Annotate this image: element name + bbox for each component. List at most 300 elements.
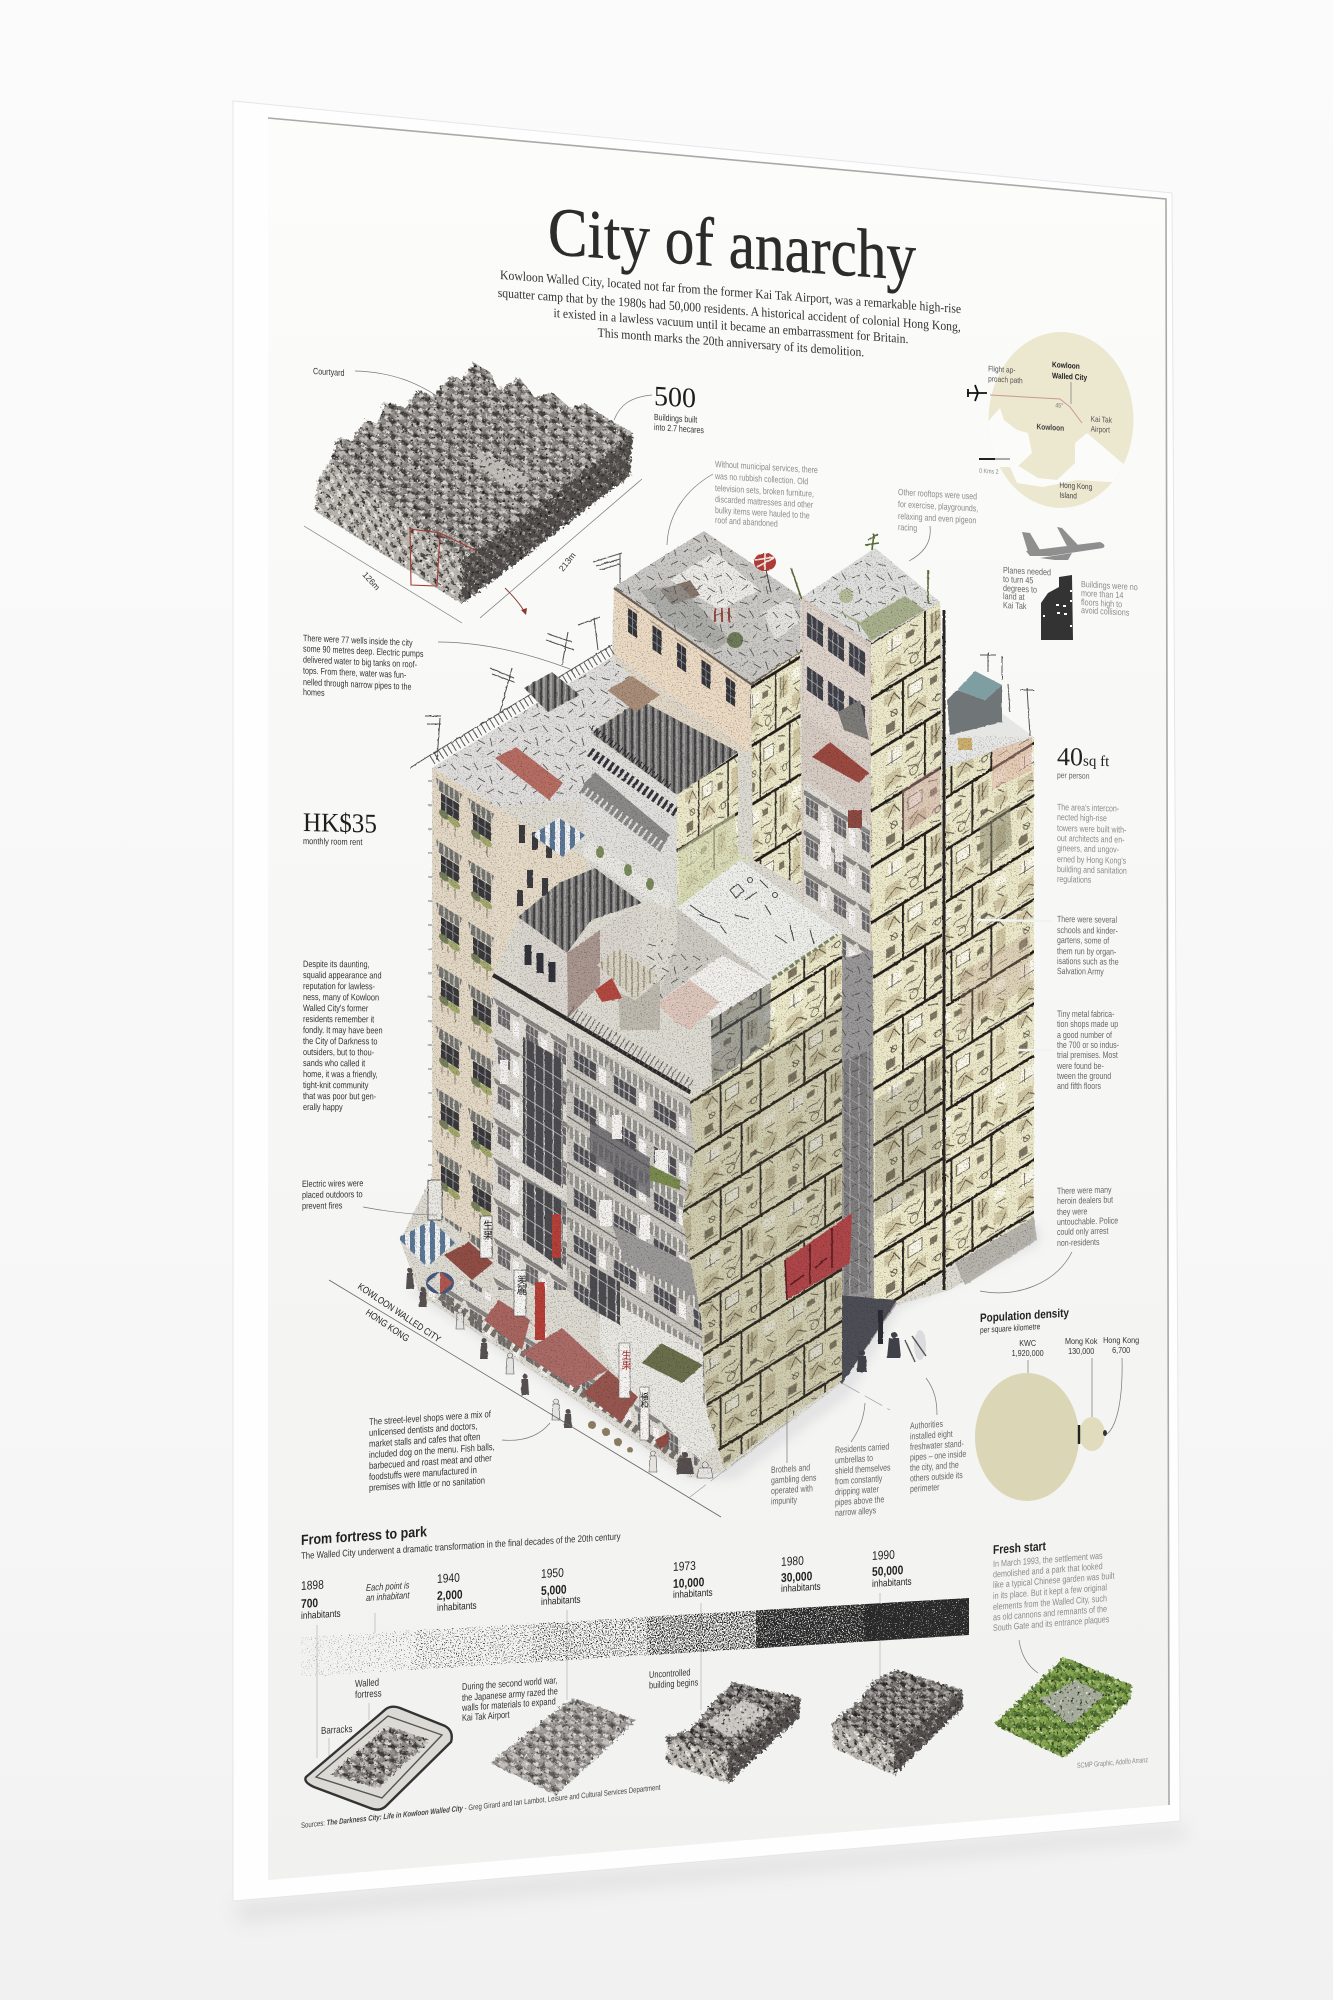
note: schools: gartens, some of bbox=[1057, 935, 1110, 946]
tower C tinted rooms bbox=[960, 738, 1032, 1030]
note: standpipes: pipes – one inside bbox=[910, 1449, 967, 1463]
note: heroin: There were many bbox=[1057, 1185, 1112, 1196]
house windows bbox=[528, 945, 552, 982]
note: heroin: non-residents bbox=[1057, 1237, 1099, 1248]
timeline 1990: 1990 bbox=[872, 1549, 895, 1563]
laundry bbox=[500, 1060, 668, 1239]
legend: each point: Each point is bbox=[366, 1579, 410, 1593]
shop signs bbox=[428, 1180, 649, 1440]
timeline 1980: 30,000 bbox=[781, 1570, 812, 1585]
note: fresh start: like a typical Chinese garden was built bbox=[993, 1571, 1115, 1590]
note: heroin: they were bbox=[1057, 1206, 1088, 1217]
deck dark room bbox=[711, 982, 771, 1085]
note: standpipes: perimeter bbox=[910, 1482, 940, 1494]
stat: 500 buildings: Buildings built bbox=[654, 412, 698, 425]
timeline 1898: inhabitants bbox=[301, 1608, 341, 1621]
note: wells: tops. From there, water was fun- bbox=[303, 666, 406, 680]
map labels: Kai Tak bbox=[1091, 414, 1112, 425]
deck striped awning bbox=[578, 772, 670, 852]
attic shed bbox=[607, 676, 660, 712]
market umbrella bbox=[426, 1272, 454, 1294]
map labels: Island bbox=[1059, 490, 1077, 501]
deck dark railing bbox=[590, 752, 676, 812]
note: wells: some 90 metres deep. Electric pumps bbox=[303, 644, 423, 659]
shack wall bbox=[618, 980, 660, 1030]
stat: floor space: per person bbox=[1057, 770, 1089, 781]
house below lower roof bbox=[518, 905, 642, 1018]
red room bbox=[785, 1213, 852, 1300]
tower C ground clutter bbox=[955, 1217, 1037, 1285]
lower terrace bbox=[657, 955, 771, 1020]
side wall scribble bbox=[640, 930, 771, 1020]
dimension lines bbox=[304, 479, 642, 623]
note: planes: to turn 45 bbox=[1003, 574, 1034, 586]
tower A wall below windows bbox=[612, 657, 751, 752]
middle left facade bbox=[493, 985, 567, 1290]
timeline 1940: 2,000 bbox=[437, 1589, 463, 1603]
shop signs: 福和 bbox=[640, 1392, 649, 1409]
thumbnail: fortress 1898 bbox=[305, 1707, 452, 1810]
red canopy 3 bbox=[583, 1370, 638, 1422]
thumbnail: 1973 bbox=[665, 1682, 800, 1783]
note: heroin: heroin dealers but bbox=[1057, 1195, 1114, 1206]
label: barracks: Barracks bbox=[321, 1723, 353, 1736]
scale bar bbox=[979, 458, 995, 460]
chart labels: KWC bbox=[1019, 1338, 1036, 1348]
main roof deck bbox=[432, 657, 642, 806]
note: towers: towers were built with- bbox=[1057, 823, 1127, 835]
tower B laundry balconies bbox=[820, 810, 862, 865]
chart leaders bbox=[1028, 1358, 1122, 1434]
stat: room rent: HK$35 bbox=[303, 807, 377, 839]
label: walled fortress: fortress bbox=[355, 1687, 382, 1700]
room courtyard lower bbox=[678, 812, 738, 905]
block left side bbox=[315, 462, 462, 604]
note: street shops: foodstuffs were manufactured in bbox=[369, 1464, 477, 1482]
timeline 1950: inhabitants bbox=[541, 1594, 581, 1607]
dimension 213m: 213m bbox=[557, 550, 578, 573]
tower B red awning bbox=[812, 742, 869, 783]
green window planter bbox=[650, 1165, 680, 1190]
chart labels: 1,920,000 bbox=[1012, 1348, 1044, 1358]
blue stripe market awning bbox=[398, 1220, 455, 1267]
frame shadow bbox=[233, 1824, 1190, 1922]
note: fresh start: as old cannons and remnants of the bbox=[993, 1604, 1107, 1623]
Hong Kong bubble bbox=[1103, 1430, 1107, 1436]
note: rubbish: Without municipal services, there bbox=[715, 459, 818, 475]
leader: electric wires bbox=[363, 1207, 437, 1215]
small windows bbox=[520, 825, 549, 906]
note: brothels: gambling dens bbox=[771, 1473, 816, 1486]
note: second world war: Kai Tak Airport bbox=[462, 1709, 510, 1723]
umbrella bbox=[754, 553, 776, 592]
note: rooftops: Other rooftops were used bbox=[898, 487, 977, 502]
note: height limit: Buildings were no bbox=[1081, 579, 1138, 592]
poster paper bbox=[268, 118, 1169, 1880]
main cutaway building bbox=[398, 531, 1040, 1480]
note: fresh start: in its place. But it kept a few original bbox=[993, 1582, 1107, 1601]
leader: street shops bbox=[502, 1423, 550, 1440]
base silhouette bbox=[400, 531, 1034, 1478]
map labels: Kowloon bbox=[1036, 422, 1065, 433]
note: umbrellas: pipes above the bbox=[835, 1494, 885, 1508]
note: street shops: market stalls and cafes that often bbox=[369, 1431, 481, 1449]
leader: 500 bbox=[614, 395, 652, 420]
note: street shops: premises with little or no sanitation bbox=[369, 1475, 485, 1493]
label: Kowloon Walled City: KOWLOON WALLED CITY bbox=[356, 1281, 443, 1345]
block right side bbox=[462, 433, 633, 604]
timeline 1973: 1973 bbox=[673, 1560, 696, 1574]
note: despite: reputation for lawless- bbox=[303, 980, 375, 992]
tower B cut rooms bbox=[871, 602, 944, 1318]
upper deck facade bbox=[581, 733, 677, 903]
map labels: Walled City bbox=[1052, 371, 1088, 383]
note: despite: ness, many of Kowloon bbox=[303, 991, 379, 1003]
shop signs: 美麗 bbox=[514, 1274, 526, 1296]
chart labels: 6,700 bbox=[1112, 1345, 1131, 1355]
map land disc bbox=[988, 332, 1134, 508]
note: despite: residents remember it bbox=[303, 1013, 375, 1025]
note: rubbish: was no rubbish collection. Old bbox=[714, 471, 808, 487]
border line right bbox=[690, 1383, 890, 1497]
map labels: 45° bbox=[1055, 403, 1064, 410]
leader: brothels bbox=[786, 1387, 788, 1463]
shop signs: 生果 bbox=[480, 1219, 492, 1241]
tower A roof bbox=[614, 531, 800, 683]
legend: each point: an inhabitant bbox=[366, 1589, 410, 1603]
sources: Sources: The Darkness City: Life in Kowloon Walled City - Greg Girard and Ian Lambot, Leisure and Cultural Services Department bbox=[301, 1784, 661, 1830]
courtyard room bbox=[677, 853, 752, 908]
front dense facade bbox=[567, 1033, 707, 1413]
tower B windows band bbox=[804, 602, 870, 760]
note: fresh start: elements from the Walled City, such bbox=[993, 1593, 1107, 1612]
note: electric wires: Electric wires were bbox=[302, 1177, 364, 1189]
leader: courtyard bbox=[355, 371, 437, 396]
chart labels: 130,000 bbox=[1068, 1346, 1095, 1356]
red market awning left bbox=[444, 1242, 493, 1280]
thumbnail: 1940s bbox=[490, 1698, 636, 1795]
note: schools: schools and kinder- bbox=[1057, 925, 1118, 936]
tower A facade bbox=[614, 590, 751, 752]
block top surface bbox=[330, 363, 633, 560]
stairwell scribble bbox=[838, 950, 874, 1300]
deck plant balcony bbox=[582, 840, 672, 910]
frame inner edge bbox=[268, 118, 1169, 1805]
note: despite: sands who called it bbox=[303, 1057, 366, 1069]
chart labels: Hong Kong bbox=[1103, 1335, 1139, 1345]
tower A antenna bbox=[593, 553, 622, 583]
note: rubbish: discarded mattresses and other bbox=[715, 494, 813, 510]
note: schools: There were several bbox=[1057, 914, 1117, 925]
timeline 1898: 700 bbox=[301, 1597, 318, 1611]
grate windows column bbox=[523, 1037, 563, 1188]
stat: 500 buildings: 500 bbox=[654, 381, 696, 415]
lower block shading bbox=[682, 1000, 842, 1467]
aerial city block illustration bbox=[304, 363, 642, 623]
note: despite: tight-knit community bbox=[303, 1079, 369, 1091]
bubble contact bbox=[1078, 1425, 1080, 1444]
tower C roof bbox=[944, 712, 1034, 767]
small red canopy bbox=[655, 1432, 669, 1450]
pipe between towers bbox=[942, 610, 946, 1290]
pale lower facade bbox=[600, 1295, 720, 1470]
detail cutout outline bbox=[410, 529, 477, 586]
window block bbox=[590, 1265, 620, 1325]
note: planes: Planes needed bbox=[1003, 565, 1051, 578]
note: metal shops: a good number of bbox=[1057, 1030, 1113, 1040]
note: uncontrolled building: building begins bbox=[649, 1676, 698, 1691]
cut rooms mid block bbox=[677, 753, 738, 897]
note: fresh start: demolished and a park that looked bbox=[993, 1561, 1103, 1580]
tower B facade bbox=[802, 597, 871, 1050]
leader: schools bbox=[977, 920, 1052, 921]
icon: grey plane bbox=[1022, 527, 1104, 560]
intro paragraph: This month marks the 20th anniversary of its demolition. bbox=[598, 325, 864, 360]
note: standpipes: the city, and the bbox=[910, 1460, 959, 1473]
timeline 1950: 1950 bbox=[541, 1567, 564, 1581]
note: street shops: unlicensed dentists and doctors, bbox=[369, 1420, 477, 1438]
stairwell ladder bbox=[844, 1050, 870, 1296]
dots 1973 bbox=[647, 1610, 756, 1655]
leader: rooftops bbox=[909, 526, 930, 561]
timeline 1940: 1940 bbox=[437, 1572, 460, 1586]
note: rooftops: relaxing and even pigeon bbox=[898, 511, 976, 526]
courtyard opening bbox=[471, 451, 532, 488]
dots 1940 bbox=[415, 1624, 533, 1670]
note: rooftops: racing bbox=[898, 522, 917, 533]
railing balcony bbox=[570, 1012, 690, 1086]
timeline 1950: 5,000 bbox=[541, 1584, 567, 1598]
upper-middle beige facade bbox=[495, 806, 587, 970]
note: towers: out architects and en- bbox=[1057, 833, 1125, 845]
heading: fresh start: Fresh start bbox=[993, 1540, 1046, 1557]
wires left of facade bbox=[428, 780, 432, 1180]
timeline 1990: 50,000 bbox=[872, 1564, 903, 1579]
map labels: proach path bbox=[988, 374, 1023, 386]
leader: wells bbox=[438, 642, 570, 669]
roof railing bbox=[432, 650, 612, 760]
alley pedestrians and standpipe bbox=[857, 1310, 926, 1372]
note: wells: delivered water to big tanks on roof- bbox=[303, 655, 417, 670]
dimension 126m: 126m bbox=[361, 570, 382, 592]
note: umbrellas: umbrellas to bbox=[835, 1453, 873, 1466]
map labels: Kowloon bbox=[1052, 360, 1080, 371]
note: wells: nelled through narrow pipes to the bbox=[303, 677, 412, 692]
thumbnail: park bbox=[995, 1657, 1132, 1758]
red canopy 1 bbox=[484, 1300, 530, 1350]
arrow to Walled City bbox=[1070, 382, 1072, 404]
tower B rooftop garden bbox=[791, 534, 928, 641]
red room detail bbox=[785, 1228, 832, 1300]
note: uncontrolled building: Uncontrolled bbox=[649, 1666, 691, 1680]
small red awning bbox=[595, 978, 622, 1002]
subheading: The Walled City underwent a dramatic transformation in the final decades of the 20th century bbox=[301, 1531, 621, 1561]
tin shack bbox=[597, 948, 657, 1000]
dots 1898 bbox=[301, 1630, 415, 1677]
note: heroin: untouchable. Police bbox=[1057, 1216, 1119, 1227]
note: fresh start: In March 1993, the settlement was bbox=[993, 1551, 1103, 1569]
map water bbox=[985, 408, 1127, 487]
dark alley bbox=[838, 1295, 897, 1384]
red canopy 2 bbox=[522, 1328, 608, 1388]
note: heroin: could only arrest bbox=[1057, 1226, 1109, 1237]
tower A roof scribble bbox=[614, 531, 800, 683]
note: standpipes: freshwater stand- bbox=[910, 1439, 964, 1452]
ground wash bbox=[405, 1225, 1040, 1480]
note: metal shops: and fifth floors bbox=[1057, 1081, 1101, 1091]
tower B tinted rooms bbox=[875, 765, 940, 1220]
note: planes: Kai Tak bbox=[1003, 600, 1027, 611]
note: rubbish: bulky items were hauled to the bbox=[715, 505, 810, 521]
label: Hong Kong: HONG KONG bbox=[364, 1307, 412, 1344]
tower A ledge bbox=[614, 588, 802, 684]
timeline 1980: inhabitants bbox=[781, 1581, 821, 1594]
note: standpipes: Authorities bbox=[910, 1419, 943, 1431]
terrace figures bbox=[690, 878, 814, 944]
grey corrugated roof lower bbox=[518, 868, 642, 953]
note: street shops: The street-level shops were a mix of bbox=[369, 1408, 491, 1427]
pale shopfront strip bbox=[420, 1280, 700, 1478]
deck dark room shade bbox=[711, 982, 771, 1085]
note: wells: homes bbox=[303, 687, 325, 698]
note: wells: There were 77 wells inside the city bbox=[303, 633, 413, 648]
pink deck section bbox=[657, 980, 720, 1030]
map labels: Airport bbox=[1091, 424, 1110, 435]
note: despite: home, it was a friendly, bbox=[303, 1068, 378, 1080]
note: metal shops: tion shops made up bbox=[1057, 1019, 1119, 1029]
note: brothels: impunity bbox=[771, 1495, 798, 1507]
chart labels: Mong Kok bbox=[1065, 1336, 1097, 1346]
leader: fresh start bbox=[1019, 1640, 1038, 1673]
grey corrugated roof upper bbox=[591, 700, 738, 795]
roof striped shed bbox=[524, 672, 580, 712]
note: second world war: During the second world war, bbox=[462, 1674, 557, 1692]
note: metal shops: Tiny metal fabrica- bbox=[1057, 1009, 1115, 1019]
note: rubbish: roof and abandoned bbox=[715, 515, 778, 529]
note: metal shops: trial premises. Most bbox=[1057, 1050, 1118, 1060]
street goods bbox=[588, 1421, 633, 1453]
stat: 500 buildings bbox=[654, 381, 704, 435]
heading: from fortress to park: From fortress to park bbox=[301, 1523, 427, 1548]
note: despite: Walled City's former bbox=[303, 1002, 369, 1014]
note: height limit: more than 14 bbox=[1081, 588, 1124, 601]
note: metal shops: were found be- bbox=[1056, 1061, 1104, 1071]
note: metal shops: the 700 or so indus- bbox=[1057, 1040, 1119, 1050]
roof red awning bbox=[495, 747, 563, 800]
locator map bbox=[967, 332, 1134, 508]
tower A cut rooms bbox=[751, 652, 802, 887]
note: standpipes: others outside its bbox=[910, 1470, 963, 1484]
stat: floor space: 40sq ft bbox=[1057, 742, 1110, 772]
note: brothels: Brothels and bbox=[771, 1463, 811, 1475]
note: umbrellas: narrow alleys bbox=[835, 1505, 876, 1518]
left facade columns bbox=[433, 768, 495, 1260]
note: umbrellas: Residents carried bbox=[835, 1442, 890, 1455]
pale ledge roofline bbox=[493, 975, 690, 1092]
upper roof railing bbox=[592, 728, 672, 788]
note: despite: Despite its daunting, bbox=[303, 958, 370, 970]
note: second world war: walls for materials to expand bbox=[461, 1695, 556, 1713]
leader: heroin bbox=[980, 1252, 1072, 1293]
note: umbrellas: from constantly bbox=[835, 1473, 883, 1487]
tower C cut rooms bbox=[946, 737, 1034, 1270]
front dark grates bbox=[590, 1120, 650, 1198]
note: despite: outsiders, but to thou- bbox=[303, 1046, 374, 1058]
blue striped awning bbox=[532, 818, 585, 857]
lower grates bbox=[523, 1180, 563, 1270]
chart heading: Population density bbox=[980, 1307, 1070, 1325]
terrace planters bbox=[773, 936, 838, 980]
timeline 1940: inhabitants bbox=[437, 1600, 477, 1613]
deck awning ribs bbox=[580, 788, 664, 848]
note: metal shops: tween the ground bbox=[1057, 1071, 1111, 1081]
house stained wall bbox=[567, 930, 600, 1018]
leader: umbrellas bbox=[851, 1403, 865, 1442]
leader: standpipes bbox=[926, 1378, 937, 1415]
note: fresh start: South Gate and its entrance plaques bbox=[993, 1614, 1109, 1633]
note: towers: nected high-rise bbox=[1057, 812, 1107, 824]
note: rubbish: television sets, broken furniture, bbox=[715, 483, 814, 499]
leader: rubbish bbox=[667, 474, 713, 545]
note: despite: erally happy bbox=[303, 1101, 343, 1112]
map labels: Flight ap- bbox=[988, 364, 1016, 375]
note: standpipes: installed eight bbox=[910, 1429, 953, 1442]
note: despite: squalid appearance and bbox=[303, 969, 382, 981]
timeline 1973: 10,000 bbox=[673, 1576, 704, 1591]
note: schools: Salvation Army bbox=[1057, 966, 1105, 977]
thumbnail: 1990 bbox=[832, 1670, 963, 1775]
dots 1950 bbox=[533, 1617, 647, 1662]
dots 1990 bbox=[864, 1598, 969, 1642]
note: brothels: operated with bbox=[771, 1483, 813, 1496]
population density chart bbox=[975, 1307, 1139, 1501]
timeline 1990: inhabitants bbox=[872, 1576, 912, 1589]
tower A rooftop details bbox=[640, 552, 800, 650]
icon: building silhouette bbox=[1041, 575, 1073, 640]
note: towers: erned by Hong Kong's bbox=[1057, 854, 1126, 866]
intro paragraph: Kowloon Walled City, located not far from the former Kai Tak Airport, was a remarkable high-rise bbox=[500, 267, 962, 316]
green canopy bbox=[642, 1343, 703, 1383]
main terrace bbox=[677, 860, 842, 982]
intro paragraph: it existed in a lawless vacuum until it became an embarrassment for Britain. bbox=[554, 305, 908, 346]
credit: SCMP Graphic, Adolfo Arranz bbox=[1077, 1756, 1148, 1770]
map labels: Hong Kong bbox=[1059, 480, 1092, 492]
main roof scribble bbox=[432, 657, 642, 806]
tower B roof bbox=[802, 548, 940, 643]
note: despite: fondly. It may have been bbox=[303, 1024, 383, 1036]
title: City of anarchy bbox=[548, 192, 916, 295]
note: planes: degrees to bbox=[1003, 583, 1037, 595]
tower B roof scribble bbox=[802, 548, 940, 643]
note: height limit: avoid collisions bbox=[1081, 605, 1129, 618]
plane symbol bbox=[967, 385, 987, 401]
intro paragraph: squatter camp that by the 1980s had 50,000 residents. A historical accident of colonial Hong Kong, bbox=[498, 285, 961, 334]
note: electric wires: placed outdoors to bbox=[302, 1188, 363, 1200]
note: despite: the City of Darkness to bbox=[303, 1035, 378, 1047]
stairwell column bbox=[838, 950, 897, 1383]
note: planes: land at bbox=[1003, 591, 1025, 602]
tower B lower balconies bbox=[804, 780, 870, 1010]
note: towers: The area's intercon- bbox=[1057, 802, 1119, 814]
population dot strip bbox=[301, 1598, 969, 1677]
note: rooftops: for exercise, playgrounds, bbox=[898, 499, 978, 514]
stat: 500 buildings: into 2.7 hecares bbox=[654, 422, 704, 435]
note: height limit: floors high to bbox=[1081, 597, 1123, 610]
note: schools: them run by organ- bbox=[1057, 946, 1117, 957]
note: second world war: the Japanese army razed the bbox=[462, 1685, 558, 1703]
leader: metal shops bbox=[1017, 1049, 1052, 1051]
street pedestrians bbox=[406, 1268, 713, 1478]
